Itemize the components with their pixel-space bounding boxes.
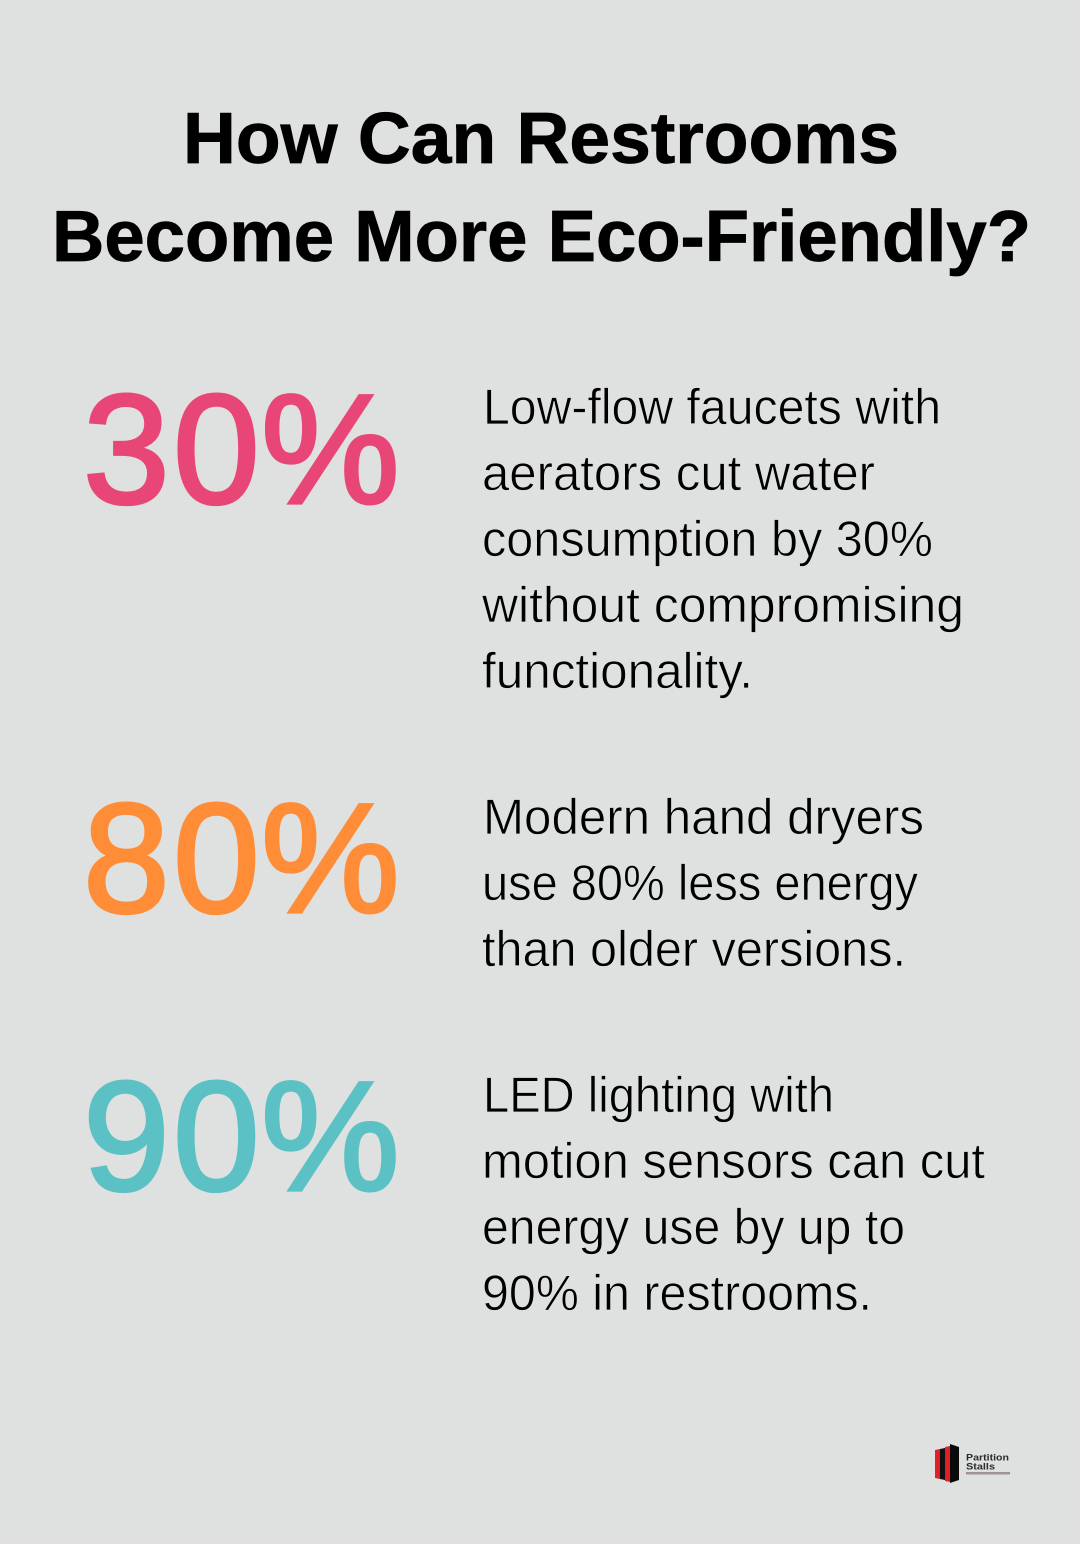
text block: LED lighting: energy use by up to	[482, 1199, 905, 1255]
text block: hand dryers: use 80% less energy	[482, 855, 918, 911]
text block: LED lighting	[482, 1067, 985, 1321]
text block: hand dryers: Modern hand dryers	[483, 789, 924, 845]
stat: 80%: 80%	[83, 772, 400, 946]
text block: low-flow faucets: without compromising	[481, 577, 964, 633]
title	[52, 99, 1031, 277]
text block: low-flow faucets: Low-flow faucets with	[483, 379, 941, 435]
text block: hand dryers: than older versions.	[482, 921, 906, 977]
text block: low-flow faucets: aerators cut water	[482, 445, 875, 501]
logo: Partition Stalls: Partition	[966, 1452, 1009, 1464]
text block: hand dryers	[482, 789, 924, 977]
text block: LED lighting: LED lighting with	[483, 1067, 834, 1123]
stat: 30%: 30%	[83, 363, 400, 537]
title: How Can Restrooms	[183, 99, 899, 179]
text block: low-flow faucets: functionality.	[482, 643, 753, 699]
logo: Partition Stalls	[935, 1444, 1010, 1483]
stat: 90%: 90%	[83, 1050, 400, 1224]
text block: LED lighting: motion sensors can cut	[482, 1133, 985, 1189]
text block: LED lighting: 90% in restrooms.	[482, 1265, 872, 1321]
text block: low-flow faucets	[481, 379, 964, 699]
title: Become More Eco-Friendly?	[52, 197, 1031, 277]
logo: Partition Stalls: Stalls	[966, 1462, 995, 1472]
text block: low-flow faucets: consumption by 30%	[482, 511, 933, 567]
